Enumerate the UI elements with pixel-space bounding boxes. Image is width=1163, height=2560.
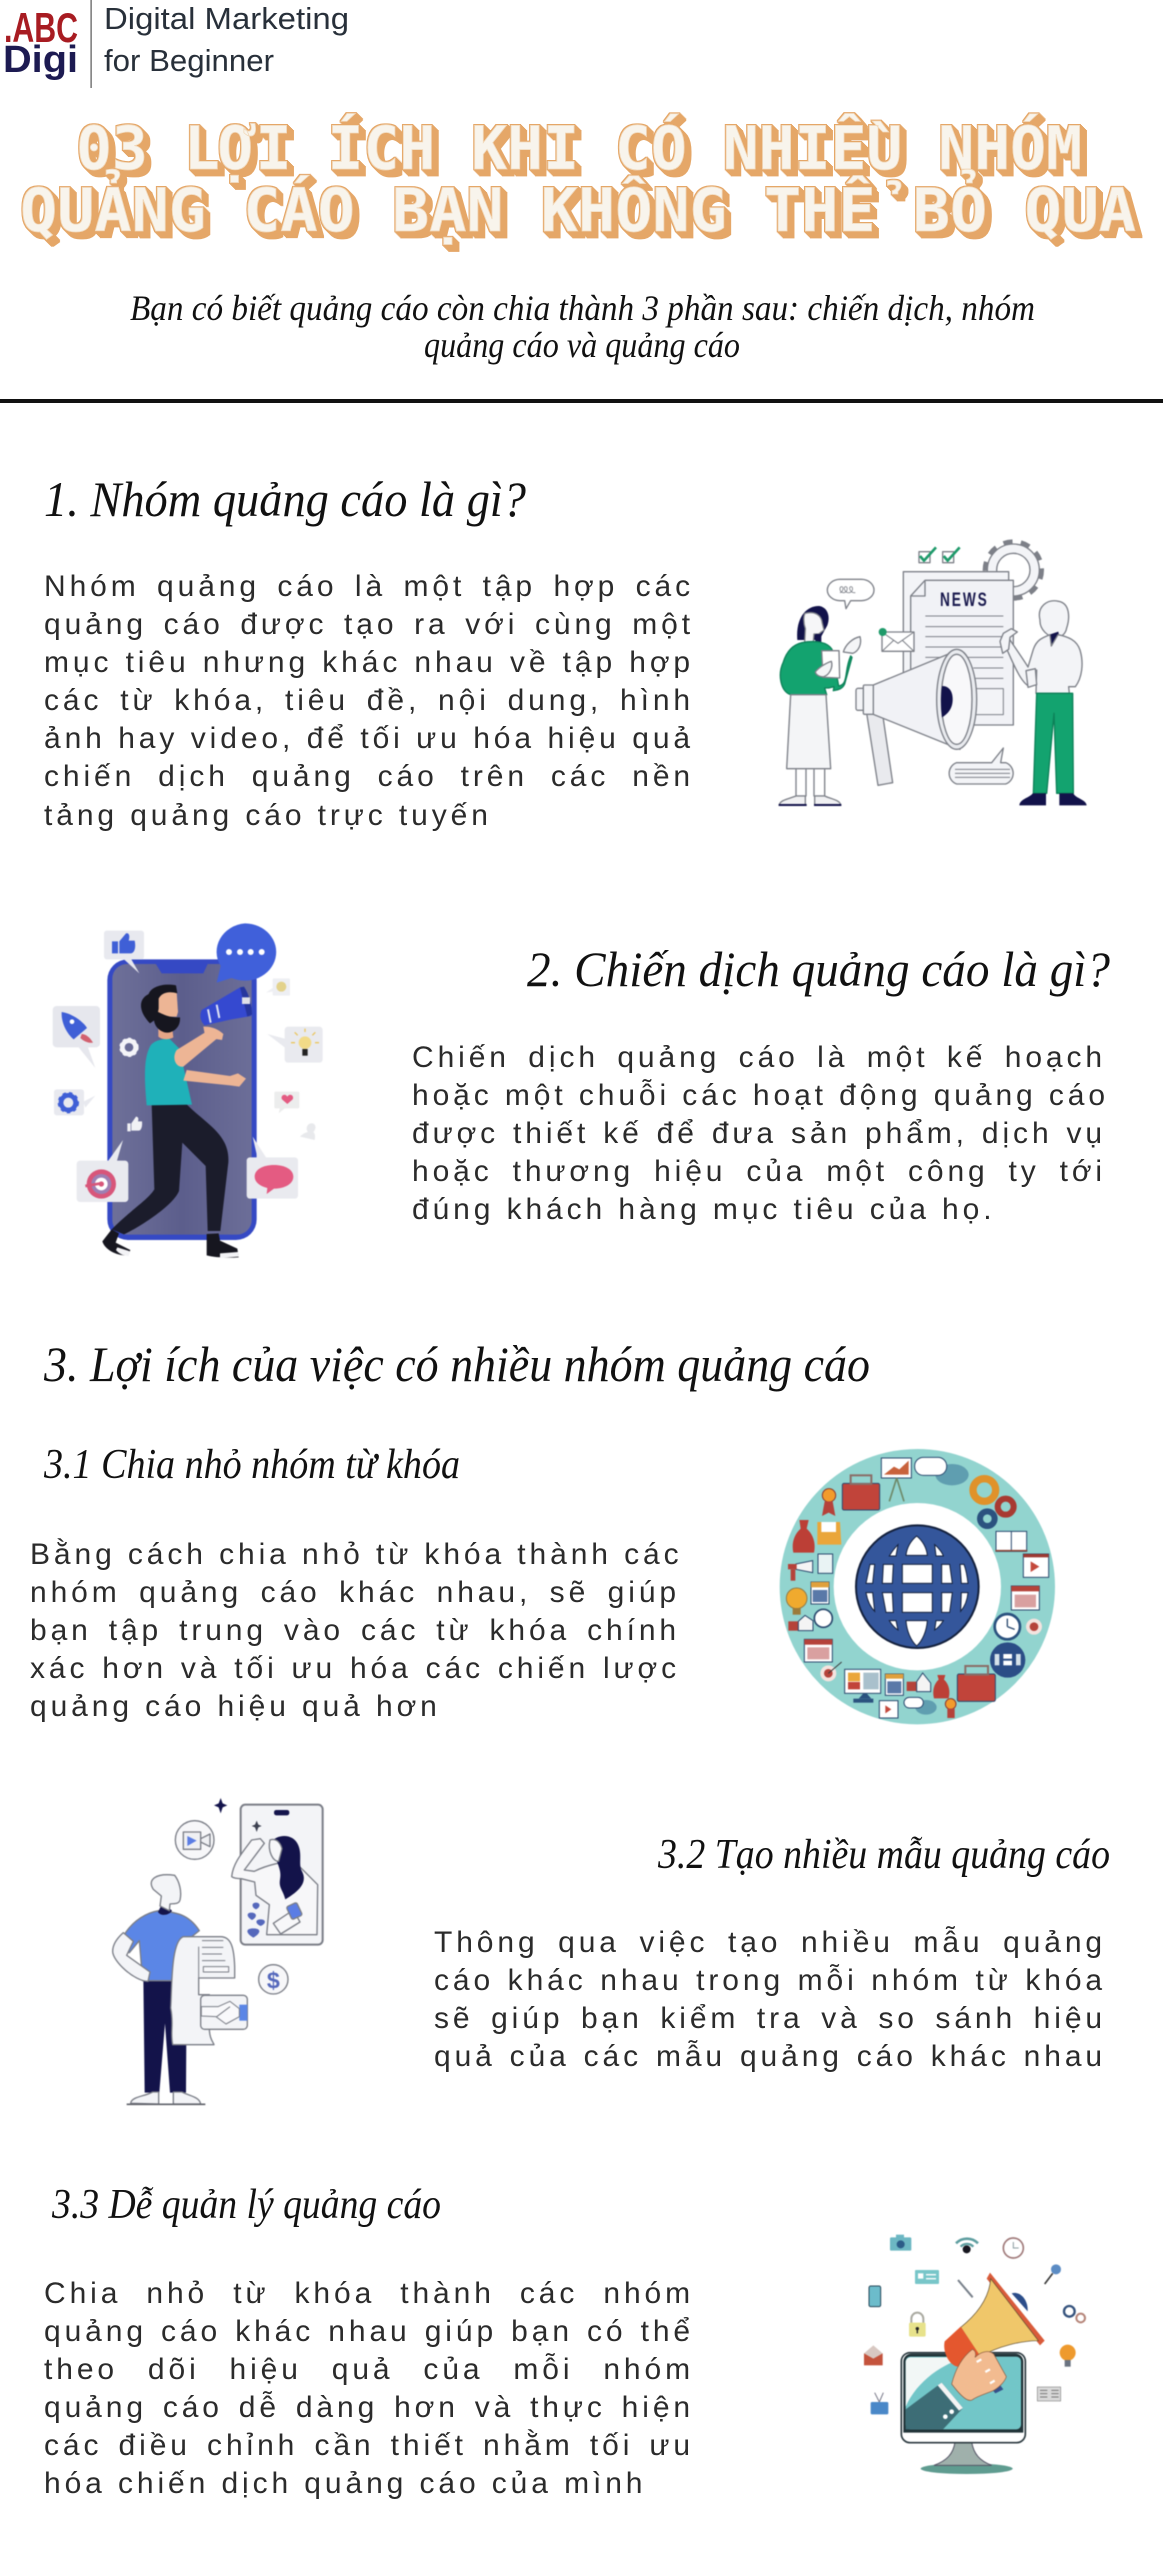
doc and megaphone left (818, 1554, 833, 1573)
bag (793, 1520, 815, 1553)
newspaper (1037, 2387, 1061, 2401)
text block 1: Nhóm quảng cáo là một tập hợp các (44, 570, 694, 603)
dollar sign: $ (267, 1967, 280, 1993)
text block 3.2 (434, 1926, 1106, 2073)
scroll (171, 1937, 235, 2045)
monitor stand (921, 2463, 1013, 2474)
gear bubble (54, 1089, 84, 1115)
text block 3.1: quảng cáo hiệu quả hơn (30, 1690, 441, 1723)
thumb and clock (788, 1621, 798, 1631)
dollar (259, 1965, 288, 1994)
clock (995, 1614, 1020, 1639)
bulb bubble (267, 1027, 323, 1063)
ring icons (786, 1457, 1049, 1718)
wifi (956, 2239, 978, 2243)
magnifier (1051, 2264, 1061, 2274)
chats (915, 1700, 937, 1715)
megaphone (987, 2273, 1045, 2345)
handshake (201, 1995, 247, 2029)
bulb (1060, 2345, 1076, 2361)
phone (241, 1805, 323, 1945)
thumbs bubble (104, 931, 144, 973)
chat bubble (217, 923, 276, 983)
man (1039, 601, 1069, 638)
text block 1: tảng quảng cáo trực tuyến (44, 799, 492, 832)
person (112, 1104, 228, 1234)
text block 1: mục tiêu nhưng khác nhau về tập hợp (44, 646, 694, 679)
sparkles (214, 1798, 227, 1813)
logo: ABC Digi: Digital Marketing (104, 1, 349, 36)
illustration: globe ring (779, 1448, 1056, 1725)
text block 2 (412, 1041, 1109, 1226)
text block 3.3: theo dõi hiệu quả của mỗi nhóm (44, 2353, 694, 2386)
envelope (882, 632, 914, 651)
subtitle: quảng cáo và quảng cáo (424, 325, 740, 365)
text block 3.1: bạn tập trung vào các từ khóa chính (30, 1614, 680, 1647)
card (915, 2270, 939, 2284)
calendar right (1011, 1586, 1039, 1610)
text block 3.1 (30, 1538, 682, 1723)
folder (817, 1522, 841, 1545)
text block 1 (44, 570, 694, 832)
text block 3.3: các điều chỉnh cần thiết nhằm tối ưu (44, 2429, 694, 2462)
pen (958, 2280, 973, 2297)
calendar left (804, 1639, 832, 1662)
hand (952, 2349, 1006, 2400)
globe (856, 1525, 979, 1648)
arm (906, 2383, 963, 2429)
pink chat bubble (247, 1137, 298, 1199)
text block 3.3: Chia nhỏ từ khóa thành các nhóm (44, 2277, 694, 2310)
bottom bubble (949, 748, 1013, 784)
text block 3.1: nhóm quảng cáo khác nhau, sẽ giúp (30, 1576, 680, 1609)
title (20, 112, 1142, 252)
case big (957, 1674, 995, 1701)
front page (911, 580, 1013, 725)
text block 1: ảnh hay video, để tối ưu hóa hiệu quả (44, 722, 694, 755)
text block 1: các từ khóa, tiêu đề, nội dung, hình (44, 684, 694, 717)
case (842, 1483, 880, 1510)
text block 2: đúng khách hàng mục tiêu của họ. (412, 1193, 995, 1226)
text block 3.2: quả của các mẫu quảng cáo khác nhau (434, 2040, 1106, 2073)
small calendar (811, 1582, 829, 1604)
text block 3.2: sẽ giúp bạn kiểm tra và so sánh hiệu (434, 2002, 1106, 2035)
text block 3.1: Bằng cách chia nhỏ từ khóa thành các (30, 1538, 682, 1571)
gears (973, 1479, 996, 1501)
man (143, 1977, 187, 2093)
megaphone (867, 710, 893, 785)
video small (879, 1701, 898, 1718)
target left (820, 1665, 836, 1681)
screen (845, 1669, 881, 1693)
text block 3.2: cáo khác nhau trong mỗi nhóm từ khóa (434, 1964, 1106, 1997)
small thumb (127, 1117, 142, 1131)
thumb (907, 1682, 917, 1691)
title: QUẢNG CÁO BẠN KHÔNG THỂ BỎ QUA (20, 168, 1136, 246)
illustration: megaphone from monitor (863, 2234, 1087, 2475)
text block 2: Chiến dịch quảng cáo là một kế hoạch (412, 1041, 1106, 1074)
text block 3.2: Thông qua việc tạo nhiều mẫu quảng (434, 1926, 1106, 1959)
small globe (990, 1642, 1025, 1678)
lock (911, 2313, 923, 2323)
cal small (885, 1674, 903, 1695)
bubble (827, 579, 874, 609)
text block 3.1: xác hơn và tối ưu hóa các chiến lược (30, 1652, 680, 1685)
logo: ABC Digi: for Beginner (104, 43, 274, 78)
coin bubble (273, 978, 290, 996)
gear (989, 545, 1038, 595)
gear on phone (122, 1041, 136, 1054)
phone (869, 2286, 881, 2307)
logo: ABC Digi (3, 0, 349, 88)
text block 2: hoặc một chuỗi các hoạt động quảng cáo (412, 1079, 1109, 1112)
easel (881, 1458, 911, 1478)
bag small (933, 1675, 949, 1698)
text block 1: chiến dịch quảng cáo trên các nền (44, 760, 694, 793)
heart bubble (274, 1092, 299, 1108)
book (996, 1531, 1027, 1551)
subtitle (130, 288, 1035, 365)
back page (903, 572, 1009, 707)
illustration: man with contract and phone (111, 1798, 324, 2106)
chat (935, 1464, 969, 1485)
monitor (901, 2353, 1025, 2443)
text block 3.3: hóa chiến dịch quảng cáo của mình (44, 2467, 646, 2500)
rosette (822, 1489, 836, 1502)
text block 3.3 (44, 2277, 694, 2500)
video (1023, 1554, 1049, 1577)
illustration: man with megaphone on phone (52, 922, 323, 1258)
woman (797, 606, 829, 640)
news label: NEWS (940, 590, 989, 611)
rocket bubble (53, 1006, 100, 1068)
camera (890, 2237, 911, 2251)
clock (1003, 2238, 1023, 2258)
logo: ABC Digi: Digi (3, 39, 78, 81)
text block 2: hoặc thương hiệu của một công ty tới (412, 1155, 1106, 1188)
illustration: news megaphone team (778, 538, 1088, 807)
checks (919, 552, 930, 563)
gears (1064, 2306, 1075, 2317)
megaphone (200, 987, 251, 1025)
target bubble (77, 1140, 128, 1202)
mail (864, 2353, 883, 2365)
text block 2: được thiết kế để đưa sản phẩm, dịch vụ (412, 1117, 1106, 1150)
bulb (786, 1588, 807, 1609)
video circle (175, 1821, 214, 1859)
tv (875, 2393, 883, 2402)
logo: ABC Digi: .ABC (4, 4, 78, 51)
text block 3.3: quảng cáo dễ dàng hơn và thực hiện (44, 2391, 694, 2424)
target right (1026, 1619, 1042, 1635)
text block 3.3: quảng cáo khác nhau giúp bạn có thể (44, 2315, 694, 2348)
text block 1: quảng cáo được tạo ra với cùng một (44, 608, 694, 641)
title: 03 LỢI ÍCH KHI CÓ NHIỀU NHÓM (76, 112, 1082, 184)
